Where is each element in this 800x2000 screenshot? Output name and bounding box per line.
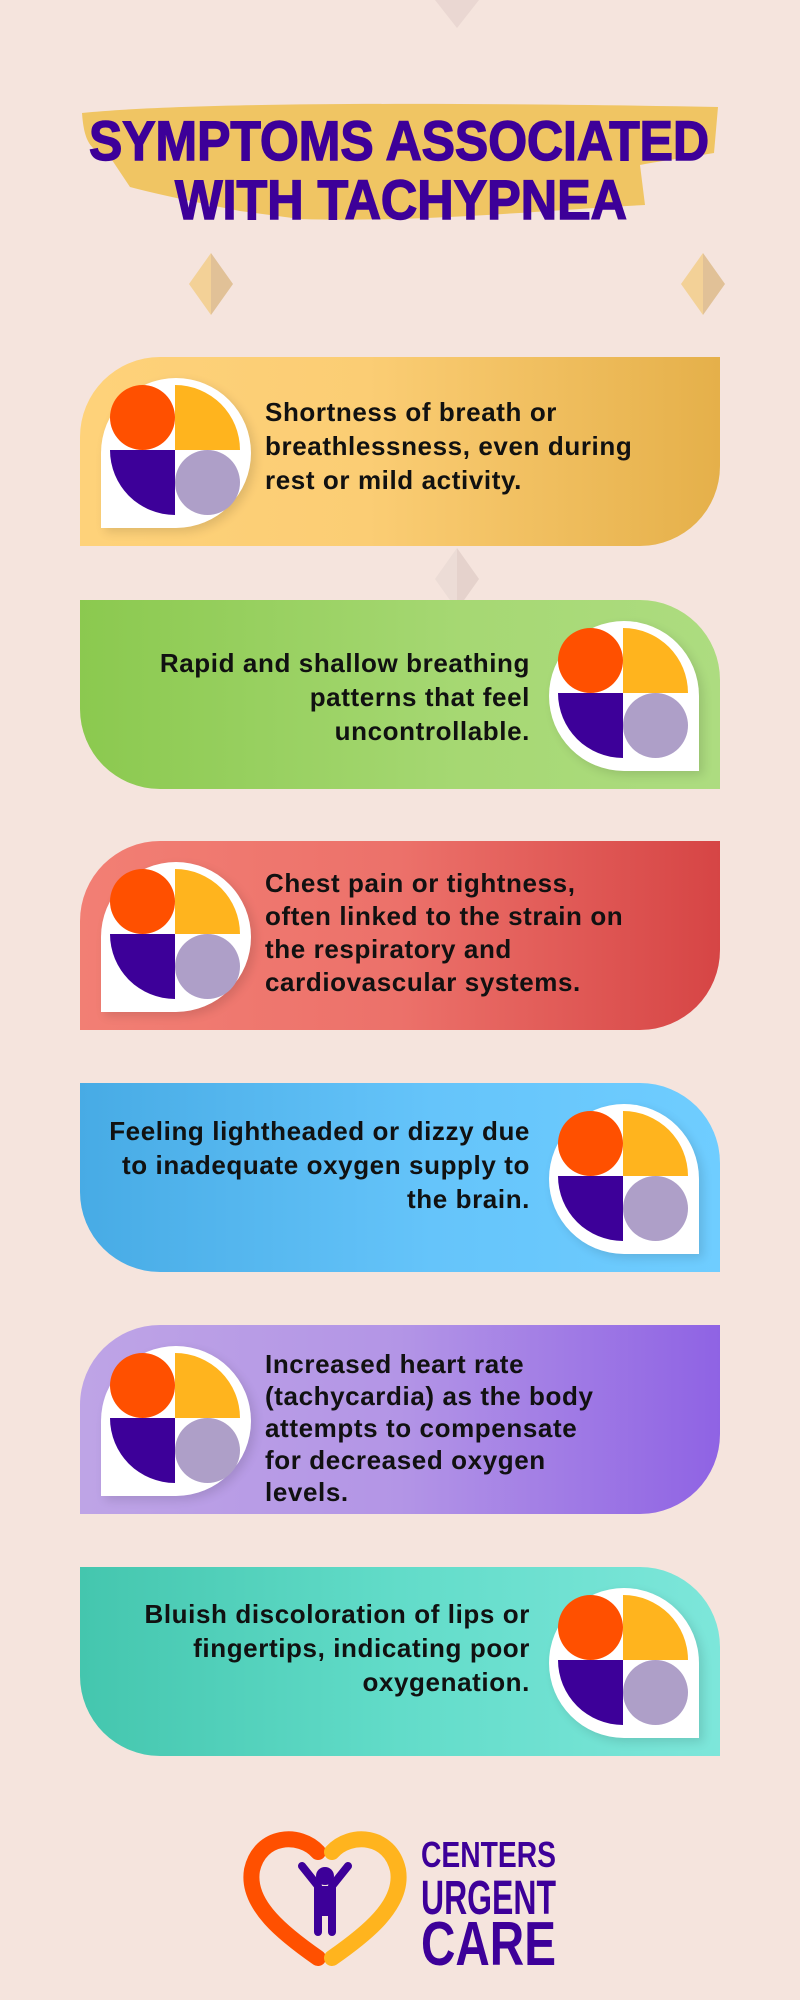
text: often linked to the strain on	[265, 901, 623, 931]
text: (tachycardia) as the body	[265, 1381, 594, 1411]
card 1	[80, 357, 720, 546]
text	[265, 868, 623, 997]
text: uncontrollable.	[335, 716, 530, 746]
text: attempts to compensate	[265, 1413, 577, 1443]
text	[109, 1116, 530, 1214]
card 5	[80, 1325, 720, 1514]
text: fingertips, indicating poor	[193, 1633, 530, 1663]
text: rest or mild activity.	[265, 465, 522, 495]
text: the respiratory and	[265, 934, 512, 964]
title: WITH TACHYPNEA	[175, 168, 627, 231]
text: the brain.	[407, 1184, 530, 1214]
title: SYMPTOMS ASSOCIATED	[89, 109, 709, 172]
diamond left	[189, 253, 233, 315]
text	[144, 1599, 530, 1697]
card 6	[80, 1567, 720, 1756]
text: Chest pain or tightness,	[265, 868, 576, 898]
logo text	[421, 1834, 556, 1970]
text: patterns that feel	[310, 682, 530, 712]
icon	[101, 378, 251, 528]
text: Feeling lightheaded or dizzy due	[109, 1116, 530, 1146]
decorative faint diamond between cards	[436, 548, 479, 600]
logo	[243, 1831, 556, 1970]
text: Bluish discoloration of lips or	[144, 1599, 530, 1629]
title	[82, 104, 718, 231]
icon	[549, 621, 699, 771]
text: to inadequate oxygen supply to	[122, 1150, 530, 1180]
icon: heart with person	[243, 1831, 407, 1966]
text	[265, 1349, 594, 1507]
icon	[549, 1104, 699, 1254]
text	[265, 397, 632, 495]
card 4	[80, 1083, 720, 1272]
icon	[101, 1346, 251, 1496]
icon	[101, 862, 251, 1012]
text: Shortness of breath or	[265, 397, 557, 427]
diamond right	[681, 253, 725, 315]
text: levels.	[265, 1477, 349, 1507]
card 2	[80, 600, 720, 789]
text: Rapid and shallow breathing	[160, 648, 530, 678]
text: breathlessness, even during	[265, 431, 632, 461]
card 3	[80, 841, 720, 1030]
text: oxygenation.	[362, 1667, 530, 1697]
decorative faint diamond top	[436, 0, 478, 28]
icon	[549, 1588, 699, 1738]
text	[160, 648, 530, 746]
text: cardiovascular systems.	[265, 967, 581, 997]
gold brush	[82, 104, 718, 220]
text: Increased heart rate	[265, 1349, 524, 1379]
text: for decreased oxygen	[265, 1445, 546, 1475]
